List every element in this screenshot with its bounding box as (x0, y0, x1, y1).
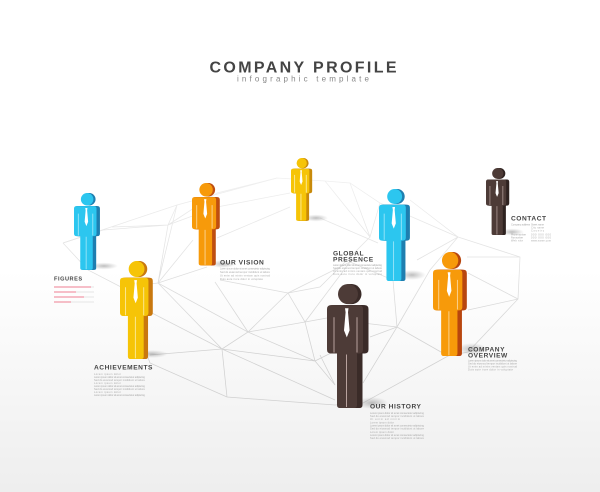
global presence block (333, 250, 383, 276)
contact block: Fax number (511, 236, 523, 240)
our history block: Lorem ipsum dolor sit amet consectetur adipiscing (370, 433, 425, 437)
achievements block (94, 364, 153, 397)
figure: orange right (433, 252, 467, 356)
company overview block: COMPANY (468, 346, 505, 354)
global presence block: PRESENCE (333, 256, 374, 264)
global presence block: Lorem ipsum dolor sit amet consectetur adipiscing (333, 263, 383, 267)
figure: blue left (74, 193, 100, 270)
contact block: 000 000 000 (531, 232, 552, 236)
contact block: CONTACT (511, 216, 547, 222)
achievements block: Lorem ipsum dolor (94, 381, 121, 385)
our history block: Sed do eiusmod tempor incididunt ut labore (370, 436, 425, 440)
company overview block: Sed do eiusmod tempor incididunt ut labore (468, 362, 518, 366)
global presence block: Sed do eiusmod tempor incididunt ut labore (333, 266, 383, 270)
achievements block: Lorem ipsum dolor sit amet consectetur adipiscing (94, 375, 146, 379)
our vision block: Ut enim ad minim veniam quis nostrud (220, 274, 271, 278)
our history block: Lorem ipsum dolor sit amet consectetur adipiscing (370, 424, 425, 428)
our history block (370, 404, 425, 440)
our history block: Ut enim ad minim (370, 417, 400, 421)
figure: orange left (192, 183, 220, 265)
global presence block: GLOBAL (333, 250, 364, 258)
our vision block: OUR VISION (220, 260, 264, 266)
figure: yellow small (291, 158, 312, 221)
achievements block: Lorem ipsum dolor sit amet consectetur adipiscing (94, 384, 146, 388)
figure: dark small (486, 168, 509, 235)
subtitle: infographic template (237, 74, 370, 84)
our vision block: Duis aute irure dolor in voluptate (220, 277, 264, 281)
contact block: Phone number (511, 232, 526, 236)
achievements block: Lorem ipsum dolor sit amet consectetur adipiscing (94, 393, 146, 397)
achievements block: ACHIEVEMENTS (94, 364, 153, 372)
figure: blue right (379, 189, 410, 281)
contact block: Country (531, 228, 545, 232)
company overview block: Ut enim ad minim veniam quis nostrud (468, 364, 518, 368)
our history block: Lorem ipsum dolor sit amet consectetur adipiscing (370, 411, 425, 415)
our vision block: Sed do eiusmod tempor incididunt ut labore (220, 270, 271, 274)
achievements block: Lorem ipsum dolor (94, 372, 121, 376)
network mesh (63, 178, 520, 405)
our history block: OUR HISTORY (370, 404, 422, 410)
company overview block: Lorem ipsum dolor sit amet consectetur adipiscing (468, 358, 518, 362)
our vision block: Lorem ipsum dolor sit amet consectetur adipiscing (220, 266, 271, 270)
global presence block: Ut enim ad minim veniam quis nostrud (333, 269, 383, 273)
figures block (54, 276, 94, 302)
company overview block: Duis aute irure dolor in voluptate (468, 368, 514, 372)
global presence block: Duis aute irure dolor in voluptate (333, 272, 383, 276)
company overview block: OVERVIEW (468, 352, 508, 360)
title: COMPANY PROFILE (210, 60, 397, 76)
our history block: Lorem ipsum dolor (370, 430, 394, 434)
contact block (511, 216, 552, 242)
achievements block: Sed do eiusmod tempor incididunt ut labore (94, 387, 146, 391)
shadows (90, 214, 524, 409)
contact block: Street name (531, 222, 545, 226)
our history block: Sed do eiusmod tempor incididunt ut labore (370, 414, 425, 418)
contact block: Web site (511, 238, 524, 242)
company overview block (468, 346, 518, 372)
contact block: City name (531, 226, 545, 230)
our history block: Sed do eiusmod tempor incididunt ut labore (370, 426, 425, 430)
achievements block: Sed do eiusmod tempor incididunt ut labore (94, 378, 146, 382)
our history block: Lorem ipsum dolor (370, 420, 394, 424)
figure: dark front (327, 284, 368, 408)
our vision block (220, 260, 271, 281)
contact block: 000 000 000 (531, 236, 552, 240)
contact block: www.name.com (531, 240, 551, 242)
figure: yellow front (120, 261, 153, 359)
achievements block: Lorem ipsum dolor (94, 390, 121, 394)
figures block: FIGURES (54, 276, 83, 282)
contact block: Company address (511, 222, 531, 226)
